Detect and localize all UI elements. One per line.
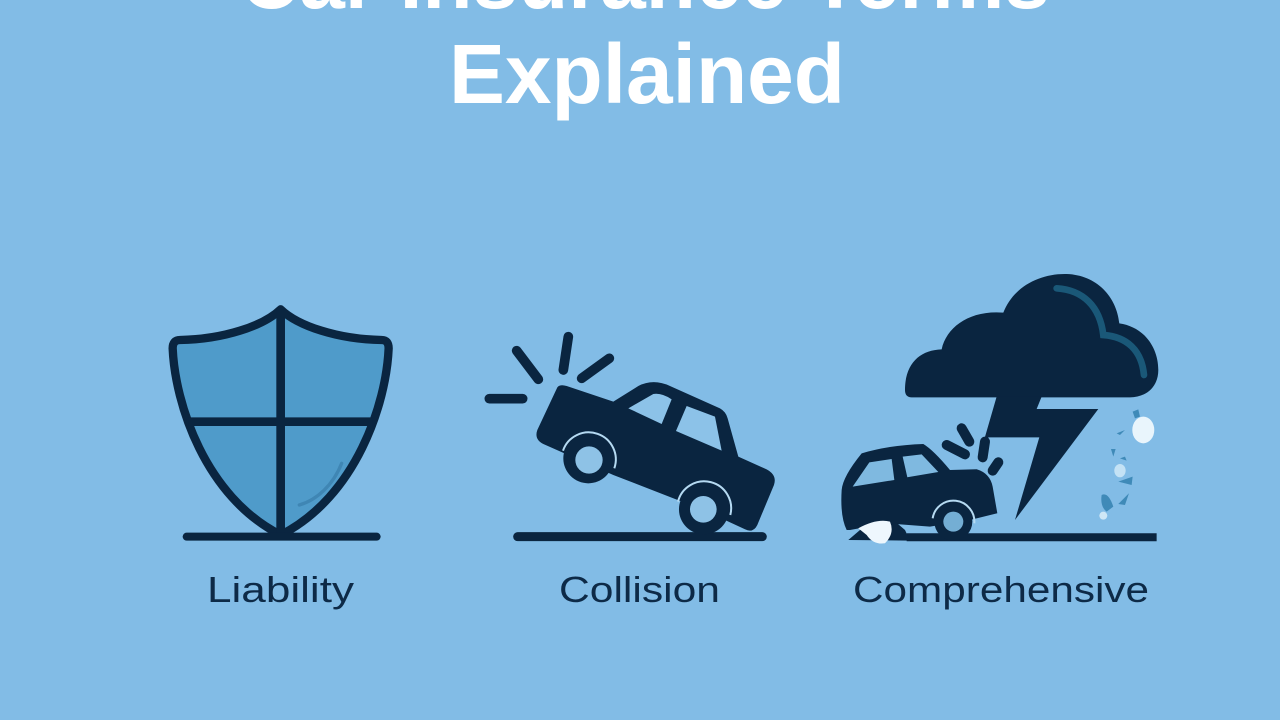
ground line [518,523,762,550]
car windows [853,454,938,487]
panel: liability [173,309,389,610]
debris and droplets [1099,409,1154,520]
title: Explained [449,27,845,121]
label: collision: Collision [559,569,720,610]
panel: collision [489,337,775,610]
label: liability: Liability [207,569,354,610]
label: comprehensive: Comprehensive [853,569,1149,610]
car windows [628,394,722,451]
car body [536,382,775,531]
icon: storm cloud and damaged car [841,274,1158,544]
crumple highlight [858,521,892,544]
car wheel [934,503,972,541]
lightning bolt [978,397,1098,520]
icon: shield [173,309,389,537]
impact lines [489,337,609,399]
ground line [907,525,1157,549]
panel: comprehensive [841,274,1158,610]
storm cloud [905,274,1158,397]
cloud highlight [1057,288,1144,375]
rear wheel [563,433,613,483]
icon: tilted car collision [489,337,775,537]
front wheel [679,484,729,534]
impact marks [947,428,998,471]
title [240,0,1050,121]
car body [841,444,997,530]
